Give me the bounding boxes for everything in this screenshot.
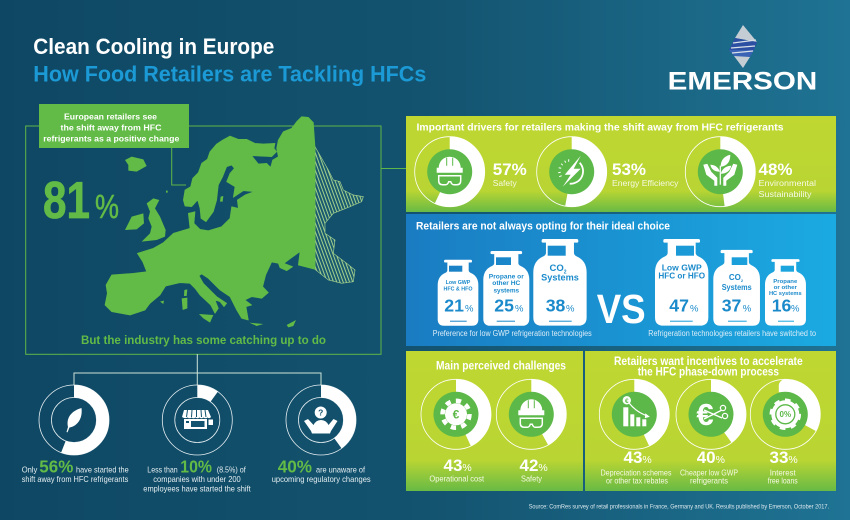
stat: depreciation: Depreciation schemes [600, 468, 672, 478]
stat: cheaper refrigerants [680, 448, 738, 486]
text: 56%: shift away from HFC refrigerants [22, 474, 128, 484]
bottle: low GWP 47% [655, 239, 708, 326]
bottle: CO2 38% [533, 239, 587, 326]
caption: switched: Refrigeration technologies retailers have switched to [648, 329, 816, 338]
heading: Main perceived challenges [436, 360, 566, 372]
bottle: low GWP 21% [438, 260, 478, 326]
caption: preference: Preference for low GWP refrigeration technologies [433, 329, 592, 338]
bottle: propane 16%: 16 [772, 296, 792, 316]
stat: safety: 57% [493, 160, 527, 179]
title: Clean Cooling in Europe [33, 34, 274, 59]
heading: Retailers want incentives to accelerate [614, 356, 803, 368]
stat: operational cost: Operational cost [429, 474, 485, 484]
bottle: CO2 38%: 38 [546, 296, 566, 316]
mainland Europe [105, 117, 315, 320]
stat: environmental sustainability: Environmental [758, 178, 816, 188]
catching up text: But the industry has some catching up to do [81, 335, 326, 347]
bottle: low GWP 47%: % [690, 304, 699, 315]
callout: positive change: refrigerants as a positive change [43, 134, 180, 144]
stat: interest free loans: Interest [770, 468, 796, 478]
bottle: propane 25%: % [515, 304, 524, 315]
donut: safety 57% [415, 137, 485, 207]
stat: cheaper refrigerants: refrigerants [690, 476, 728, 486]
bottle: low GWP 47%: HFC or HFO [658, 270, 705, 280]
panel: ideal choice [406, 214, 836, 346]
text: 40%: 40% [278, 457, 312, 477]
bottle: low GWP 21%: % [465, 304, 474, 315]
stat: cheaper refrigerants: Cheaper low GWP [680, 468, 738, 478]
donut: 40% unaware [286, 385, 356, 455]
panel: main perceived challenges [406, 351, 583, 491]
stat: operational cost [429, 456, 485, 484]
stat: energy efficiency [612, 160, 679, 188]
stat: interest free loans [768, 448, 798, 486]
statistic: 81%: % [95, 188, 119, 225]
bottle: propane 16%: % [791, 304, 800, 315]
donut: 56% started [39, 385, 109, 455]
islands [125, 157, 296, 327]
stat: interest free loans: 33% [770, 448, 798, 467]
icon: shrugging person: ? [318, 408, 323, 418]
icon: lightning [558, 156, 583, 187]
bottle: CO2 37% [713, 250, 760, 326]
icon: falling bars: € [625, 398, 629, 405]
title [33, 34, 426, 87]
stat: safety [493, 160, 527, 188]
stat: energy efficiency: Energy Efficiency [612, 178, 679, 188]
bottle: propane 16%: Propane [773, 279, 798, 285]
text: 56% [22, 457, 129, 484]
text: 10%: companies with under 200 [153, 474, 241, 484]
text: 56%: 56% [39, 457, 74, 477]
Emerson logo: EMERSON [668, 67, 817, 95]
stat: operational cost: 43% [444, 456, 472, 475]
bottle: CO2 37%: % [743, 304, 752, 315]
donut: interest free loans [750, 379, 820, 449]
bottle: propane 16%: or other [774, 285, 798, 291]
bottle: CO2 37%: CO [729, 273, 741, 282]
bottle: low GWP 21%: Low GWP [446, 280, 470, 286]
stat: depreciation: 43% [624, 448, 652, 467]
stat: energy efficiency: 53% [612, 160, 646, 179]
donut: depreciation [599, 379, 669, 449]
bottle: CO2 38%: 2 [564, 270, 567, 276]
versus: VS [597, 286, 646, 332]
stat: safety [520, 456, 548, 484]
icon: euro with scissors: € [696, 397, 714, 432]
heading: the HFC phase-down process [638, 367, 779, 379]
text: 56%: Only [22, 465, 38, 475]
bottle: CO2 37%: 37 [722, 296, 742, 316]
text: 10%: (8.5%) of [217, 465, 246, 475]
stat: safety: Safety [493, 178, 517, 188]
icon: shop [182, 410, 213, 429]
panel: map frame [26, 126, 407, 354]
connector lines [74, 354, 321, 385]
Emerson logo [668, 25, 817, 95]
callout: positive change [39, 104, 189, 148]
bottle: low GWP 47%: Low GWP [662, 263, 702, 273]
bottle: CO2 38%: Systems [541, 273, 579, 284]
stat: interest free loans: free loans [768, 476, 798, 486]
callout: positive change: European retailers see [64, 112, 157, 122]
text: 40% [272, 457, 371, 484]
donut: environment 48% [685, 137, 755, 207]
icon: zero percent badge: 0% [780, 410, 791, 419]
map of Europe [105, 117, 363, 327]
bottle: propane 16%: HC systems [769, 291, 802, 297]
stat: safety: Safety [521, 474, 543, 484]
text: 40%: upcoming regulatory changes [272, 474, 371, 484]
hatched eastern region [315, 147, 363, 283]
icon: hands and plant [703, 155, 737, 186]
bottle: propane 25%: other HC [492, 280, 521, 287]
stat: environmental sustainability: 48% [758, 160, 792, 179]
stat: safety: 42% [520, 456, 548, 475]
panel: incentives [585, 351, 836, 491]
bottle: CO2 37%: Systems [722, 283, 752, 292]
bottle: propane 25%: systems [493, 287, 520, 294]
bottle: propane 25% [483, 251, 529, 326]
bottle: CO2 38%: CO [549, 263, 564, 274]
stat: environmental sustainability: Sustainability [758, 189, 812, 199]
bottle: low GWP 47%: 47 [669, 296, 689, 316]
icon: helmet and goggles [437, 157, 463, 185]
heading: Important drivers for retailers making the shift away from HFC refrigerants [416, 122, 784, 134]
bottle: CO2 38%: % [566, 304, 575, 315]
donut: energy 53% [537, 137, 607, 207]
text: 10%: 10% [180, 457, 212, 477]
text: 10%: employees have started the shift [143, 483, 251, 493]
donut: safety [496, 379, 566, 449]
icon: helmet and goggles [518, 399, 544, 427]
text: 10%: Less than [147, 465, 178, 475]
heading [614, 356, 803, 379]
text: 10% [143, 457, 251, 493]
statistic: 81%: 81 [43, 172, 90, 230]
text: 40%: are unaware of [316, 465, 366, 475]
donut: cheaper refrigerants [676, 379, 746, 449]
text: 56%: have started the [76, 465, 129, 475]
stat: environmental sustainability [758, 160, 816, 199]
bottle: low GWP 21%: HFC & HFO [444, 286, 473, 292]
stat: depreciation: or other tax rebates [606, 476, 668, 486]
title: How Food Retailers are Tackling HFCs [33, 62, 426, 87]
donut: 10% started [162, 385, 232, 455]
bottle: propane 16% [765, 259, 806, 326]
icon: leaf [66, 408, 82, 432]
bottle: low GWP 21%: 21 [444, 296, 464, 316]
bottle: propane 25%: 25 [494, 296, 514, 316]
donut: operational cost [421, 379, 491, 449]
bottle: CO2 37%: 2 [741, 278, 744, 283]
panel: important drivers [406, 116, 836, 212]
icon: euro gear: € [453, 408, 460, 422]
stat: cheaper refrigerants: 40% [697, 448, 725, 467]
heading: Retailers are not always opting for their ideal choice [416, 220, 670, 232]
bottle: propane 25%: Propane or [489, 273, 524, 280]
stat: depreciation [600, 448, 672, 486]
callout: positive change: the shift away from HFC [60, 122, 162, 132]
